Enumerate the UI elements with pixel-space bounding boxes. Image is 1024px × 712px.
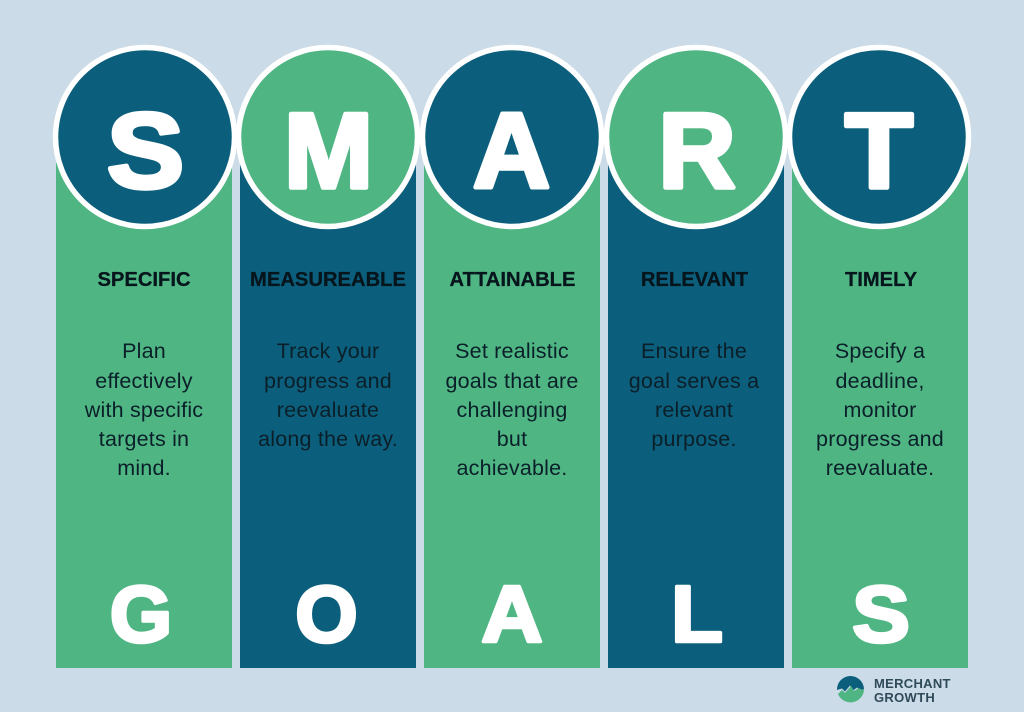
letter: G: G — [110, 570, 172, 658]
circle: letter R — [606, 48, 786, 226]
text: timely description: reevaluate. — [826, 456, 934, 480]
text: relevant description: purpose. — [651, 427, 737, 451]
text: relevant description: goal serves a — [629, 369, 759, 393]
letter: O: O — [295, 570, 358, 658]
circle: letter T — [790, 48, 968, 226]
text: measureable description: along the way. — [258, 427, 398, 451]
text: specific description: Plan — [122, 339, 166, 363]
heading: specific: SPECIFIC — [97, 269, 191, 291]
column: attainable — [422, 48, 602, 668]
circle: letter T: T — [845, 91, 913, 211]
column: timely — [790, 48, 968, 668]
text: specific description: targets in — [99, 427, 189, 451]
text: attainable description: achievable. — [457, 456, 567, 480]
text: specific description: effectively — [95, 369, 193, 393]
text: specific description: with specific — [84, 398, 203, 422]
circle: letter S — [56, 48, 234, 226]
text: timely description: monitor — [843, 398, 917, 422]
text: measureable description: reevaluate — [277, 398, 379, 422]
circle: letter A — [422, 48, 602, 226]
text: attainable description: goals that are — [445, 369, 579, 393]
column: specific — [56, 48, 234, 668]
wordmark: GROWTH — [874, 690, 935, 705]
text: measureable description: Track your — [277, 339, 379, 363]
letter: A: A — [481, 570, 543, 659]
letter: S: S — [852, 569, 910, 659]
text: relevant description: Ensure the — [641, 339, 747, 363]
text: timely description: deadline, — [835, 369, 925, 393]
circle: letter M: M — [284, 90, 373, 210]
logo: Merchant Growth — [837, 676, 951, 705]
text: specific description: mind. — [117, 456, 171, 480]
text: timely description: progress and — [816, 427, 944, 451]
text: timely description: Specify a — [835, 339, 925, 363]
heading: attainable: ATTAINABLE — [450, 269, 575, 291]
wordmark: MERCHANT — [874, 676, 951, 691]
column: relevant — [606, 48, 786, 668]
text: attainable description: challenging — [457, 398, 567, 422]
text: relevant description: relevant — [655, 398, 733, 422]
text: measureable description: progress and — [264, 369, 392, 393]
text: attainable description: but — [497, 427, 527, 451]
circle: letter M — [238, 48, 418, 226]
icon: mountain logo — [837, 676, 864, 702]
heading: timely: TIMELY — [845, 269, 918, 291]
circle: letter R: R — [658, 90, 736, 210]
heading: relevant: RELEVANT — [641, 269, 749, 291]
circle: letter S: S — [107, 90, 184, 211]
letter: L: L — [671, 570, 723, 659]
heading: measureable: MEASUREABLE — [250, 269, 406, 291]
column: measureable — [238, 48, 418, 668]
circle: letter A: A — [473, 90, 550, 210]
text: attainable description: Set realistic — [455, 339, 569, 363]
